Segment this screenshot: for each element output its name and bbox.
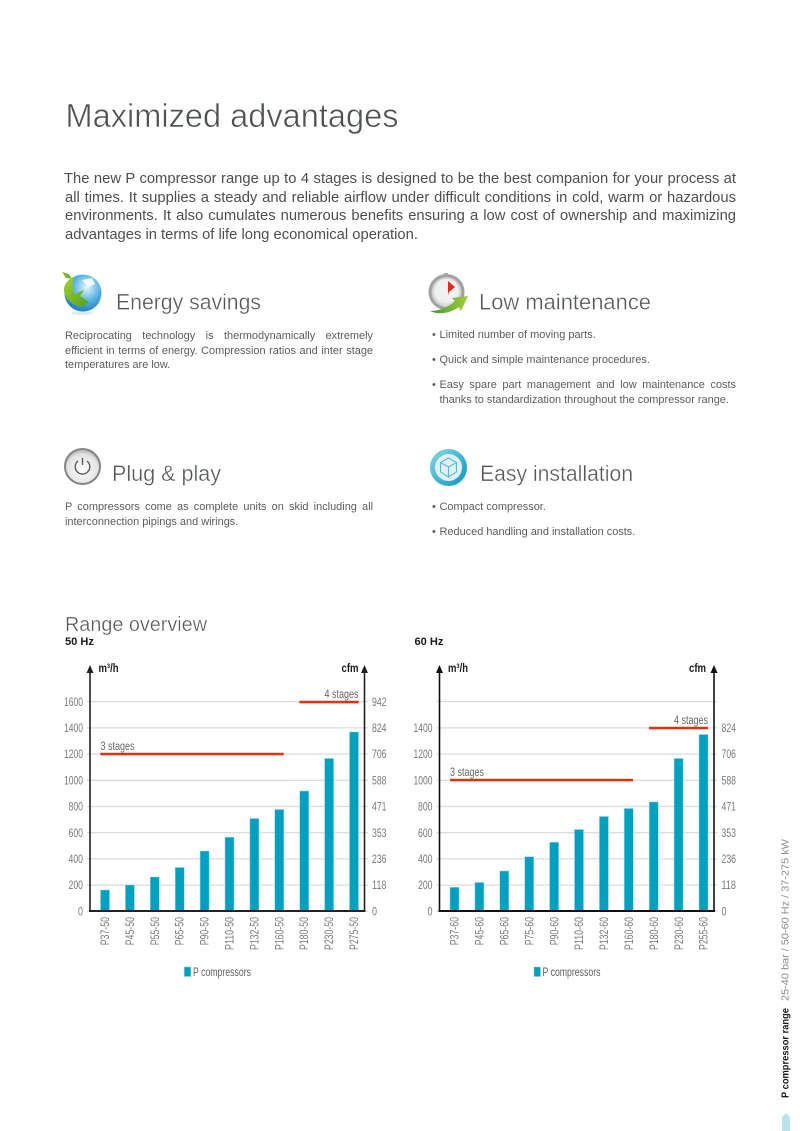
model labels: P180-60: [647, 917, 661, 950]
right axis labels: 0: [722, 904, 727, 918]
stage lines: 4 stages: [324, 687, 358, 701]
text: energy savings: [65, 330, 373, 371]
text: plug and play: [65, 501, 373, 528]
list: low maintenance: thanks to standardization throughout the compressor range.: [440, 394, 729, 406]
intro paragraph: [64, 171, 736, 243]
legend: [184, 965, 251, 979]
model labels: P110-50: [222, 917, 236, 950]
left axis labels: 400: [418, 852, 433, 866]
bars: [450, 734, 708, 911]
heading: range overview: Range overview: [65, 613, 207, 636]
list: easy installation: [432, 501, 635, 538]
left axis labels: 200: [418, 878, 433, 892]
legend: [534, 965, 600, 979]
right axis labels: 706: [722, 747, 736, 761]
stage lines: [100, 687, 359, 754]
model labels: P45-50: [123, 917, 137, 945]
axis units: cfm: [689, 661, 706, 675]
left axis labels: 1200: [414, 747, 433, 761]
left axis labels: 200: [68, 878, 83, 892]
list: low maintenance: Limited number of moving parts.: [440, 329, 596, 341]
intro paragraph: environments. It also cumulates numerous benefits ensuring a low cost of ownership and maximizing: [65, 208, 736, 224]
chart title: 60 Hz: 60 Hz: [414, 636, 444, 648]
right axis labels: 588: [722, 774, 736, 788]
model labels: P180-50: [297, 917, 311, 950]
side label: range specification: 25-40 bar / 50-60 Hz / 37-275 kW: [780, 839, 792, 1001]
page tab marker: [782, 1113, 790, 1131]
text: energy savings: efficient in terms of energy. Compression ratios and inter stage: [65, 344, 373, 356]
left axis labels: 600: [418, 826, 433, 840]
right axis labels: 353: [722, 826, 736, 840]
model labels: P160-50: [272, 917, 286, 950]
text: plug and play: P compressors come as complete units on skid including all: [65, 501, 373, 513]
left axis labels: 1000: [64, 774, 83, 788]
icon: power button: [64, 448, 101, 485]
intro paragraph: all times. It supplies a steady and reliable airflow under difficult conditions in cold, warm or hazardous: [65, 190, 736, 206]
model labels: P90-60: [547, 917, 561, 945]
model labels: P65-60: [498, 917, 512, 945]
right axis labels: 824: [372, 721, 387, 735]
model labels: P132-50: [247, 917, 261, 950]
heading: easy installation: Easy installation: [480, 461, 633, 486]
right axis labels: [372, 695, 387, 918]
left axis labels: 1400: [414, 721, 433, 735]
right axis labels: 118: [722, 878, 736, 892]
left axis labels: [414, 721, 433, 918]
model labels: P75-60: [522, 917, 536, 945]
model labels: P255-60: [697, 917, 711, 950]
model labels: P55-50: [148, 917, 162, 945]
stage lines: 3 stages: [450, 765, 484, 779]
left axis labels: 1400: [64, 721, 83, 735]
list: low maintenance: [432, 329, 736, 406]
list: low maintenance: Quick and simple maintenance procedures.: [440, 354, 650, 366]
stage lines: 3 stages: [100, 739, 134, 753]
model labels: P110-60: [572, 917, 586, 950]
side label: range specification: P compressor range: [780, 1008, 792, 1098]
left axis labels: [64, 695, 83, 918]
model labels: [448, 917, 711, 950]
heading: low maintenance: Low maintenance: [479, 290, 651, 314]
side label: range specification: [780, 839, 792, 1098]
list: low maintenance: •: [432, 378, 436, 390]
right axis labels: 236: [722, 852, 736, 866]
model labels: P90-50: [198, 917, 212, 945]
legend: P compressors: [193, 965, 251, 979]
left axis labels: 800: [68, 800, 83, 814]
left axis labels: 1600: [64, 695, 83, 709]
model labels: P65-50: [173, 917, 187, 945]
list: low maintenance: •: [432, 329, 436, 341]
text: plug and play: interconnection pipings and wirings.: [65, 516, 238, 528]
right axis labels: 0: [372, 904, 377, 918]
right axis labels: 236: [372, 852, 387, 866]
legend: P compressors: [542, 965, 600, 979]
chart: 60 Hz: [414, 636, 736, 979]
right axis labels: [722, 721, 736, 918]
list: easy installation: •: [432, 526, 436, 538]
right axis labels: 942: [372, 695, 387, 709]
right axis labels: 471: [722, 800, 736, 814]
right axis labels: 824: [722, 721, 736, 735]
axis units: [98, 661, 358, 675]
left axis labels: 600: [68, 826, 83, 840]
heading: energy savings: Energy savings: [116, 290, 261, 314]
list: low maintenance: •: [432, 354, 436, 366]
right axis labels: 118: [372, 878, 387, 892]
list: easy installation: Reduced handling and installation costs.: [440, 526, 635, 538]
title: Maximized advantages: [66, 98, 398, 135]
model labels: P160-60: [622, 917, 636, 950]
text: energy savings: Reciprocating technology is thermodynamically extremely: [65, 330, 373, 342]
axes: [86, 665, 368, 911]
gridlines and left/right ticks: [436, 702, 718, 911]
axis units: cfm: [342, 661, 358, 675]
axes: [436, 665, 718, 911]
right axis labels: 706: [372, 747, 387, 761]
model labels: P37-50: [98, 917, 112, 945]
icon: package box: [430, 449, 467, 486]
left axis labels: 0: [78, 904, 83, 918]
list: easy installation: Compact compressor.: [440, 501, 546, 513]
bars: [100, 732, 358, 911]
heading: plug and play: Plug & play: [112, 461, 222, 486]
right axis labels: 471: [372, 800, 387, 814]
model labels: P230-60: [672, 917, 686, 950]
stage lines: [450, 713, 708, 780]
intro paragraph: The new P compressor range up to 4 stages is designed to be the best companion for your process at: [64, 171, 736, 187]
model labels: P275-50: [347, 917, 361, 950]
chart: 50 Hz: [64, 636, 387, 979]
icon: energy globe: [62, 272, 102, 315]
left axis labels: 800: [418, 800, 433, 814]
left axis labels: 1000: [414, 774, 433, 788]
list: easy installation: •: [432, 501, 436, 513]
model labels: P230-50: [322, 917, 336, 950]
gridlines and left/right ticks: [87, 702, 368, 911]
list: low maintenance: Easy spare part management and low maintenance costs: [440, 378, 736, 390]
right axis labels: 588: [372, 774, 387, 788]
left axis labels: 0: [428, 904, 433, 918]
model labels: P45-60: [473, 917, 487, 945]
right axis labels: 353: [372, 826, 387, 840]
left axis labels: 1200: [64, 747, 83, 761]
icon: stopwatch: [428, 273, 468, 314]
axis units: m³/h: [98, 661, 118, 675]
intro paragraph: advantages in terms of life long economical operation.: [65, 227, 418, 243]
model labels: P132-60: [597, 917, 611, 950]
left axis labels: 400: [68, 852, 83, 866]
model labels: P37-60: [448, 917, 462, 945]
axis units: m³/h: [448, 661, 468, 675]
chart title: 50 Hz: 50 Hz: [65, 636, 94, 648]
axis units: [448, 661, 706, 675]
stage lines: 4 stages: [674, 713, 708, 727]
model labels: [98, 917, 361, 950]
text: energy savings: temperatures are low.: [65, 359, 170, 371]
